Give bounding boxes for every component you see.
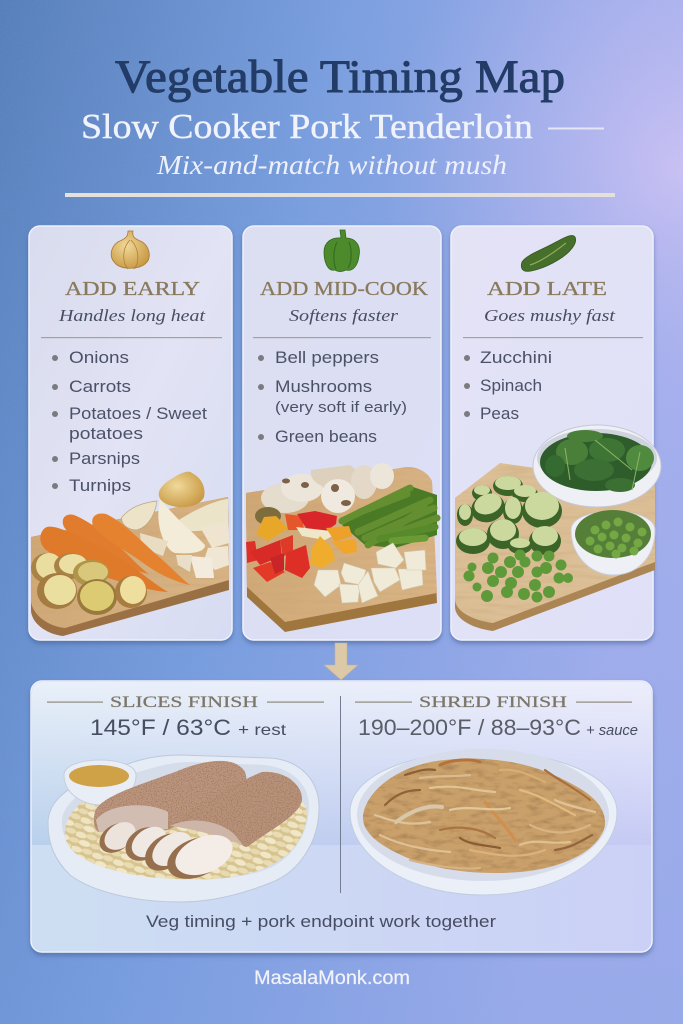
- list: [52, 348, 207, 495]
- divider: [41, 337, 222, 338]
- food photo: mushrooms, peppers, beans, cubes on board: [246, 463, 437, 632]
- title: Vegetable Timing Map: [115, 51, 565, 103]
- divider: [253, 337, 431, 338]
- heading: ADD EARLY: [65, 278, 200, 300]
- pea bowl: [571, 510, 655, 575]
- list: Peas: [480, 404, 519, 423]
- list: Spinach: [480, 376, 542, 395]
- icon: onion: [111, 231, 149, 269]
- food photo: zucchini, spinach, peas on board: [455, 425, 661, 631]
- temperature: shred: 190–200°F / 88–93°C: [358, 715, 581, 740]
- list: Carrots: [69, 377, 131, 396]
- panel: add late: [451, 226, 661, 640]
- list: [464, 348, 552, 423]
- heading: shred finish: SHRED FINISH: [419, 694, 568, 711]
- pork slices: [94, 816, 239, 887]
- panel: add mid-cook: [243, 226, 441, 640]
- pork loin front: [170, 772, 302, 847]
- photo: shredded pork bowl: [350, 749, 617, 895]
- shredded strands: [375, 760, 595, 868]
- list: [258, 348, 407, 446]
- header rule: [65, 193, 615, 197]
- description: Goes mushy fast: [484, 306, 616, 325]
- subtitle: Slow Cooker Pork Tenderloin: [81, 107, 533, 146]
- sauce bowl: [64, 760, 136, 805]
- description: Softens faster: [289, 306, 398, 325]
- icon: spinach bowl: [533, 425, 661, 507]
- footer brand: MasalaMonk.com: [254, 968, 410, 989]
- pork loin back: [94, 761, 246, 832]
- temperature: slices: 145°F / 63°C: [90, 715, 231, 740]
- divider: [463, 337, 643, 338]
- panel: add early: [29, 226, 232, 640]
- heading: ADD LATE: [487, 278, 607, 300]
- icon: green bell pepper: [324, 230, 359, 272]
- arrow: [324, 643, 358, 680]
- vertical divider: [340, 696, 341, 893]
- list: Parsnips: [69, 449, 140, 468]
- description: Handles long heat: [58, 306, 206, 325]
- list: Bell peppers: [275, 348, 379, 367]
- panel: finish temperatures: [31, 681, 652, 952]
- list: Green beans: [275, 427, 377, 446]
- food photo: root vegetables on board: [31, 472, 229, 636]
- list: (very soft if early): [275, 400, 407, 416]
- list: Zucchini: [480, 348, 552, 367]
- temperature: slices: [90, 715, 287, 740]
- temperature: slices: + rest: [238, 722, 287, 739]
- list: Onions: [69, 348, 129, 367]
- list: Turnips: [69, 476, 131, 495]
- heading: slices finish: SLICES FINISH: [110, 694, 259, 711]
- list: Mushrooms: [275, 377, 372, 396]
- zucchini slices: [456, 476, 562, 555]
- subtitle dash: [548, 128, 604, 130]
- list: Potatoes / Sweet: [69, 404, 207, 423]
- pea pile: [464, 550, 573, 602]
- icon: zucchini: [521, 236, 576, 271]
- caption: Veg timing + pork endpoint work together: [146, 913, 497, 931]
- heading: ADD MID-COOK: [260, 278, 429, 300]
- temperature: shred: + sauce: [586, 722, 638, 739]
- tagline: Mix-and-match without mush: [156, 150, 507, 180]
- list: potatoes: [69, 424, 143, 443]
- photo: sliced pork on orzo plate: [48, 755, 319, 902]
